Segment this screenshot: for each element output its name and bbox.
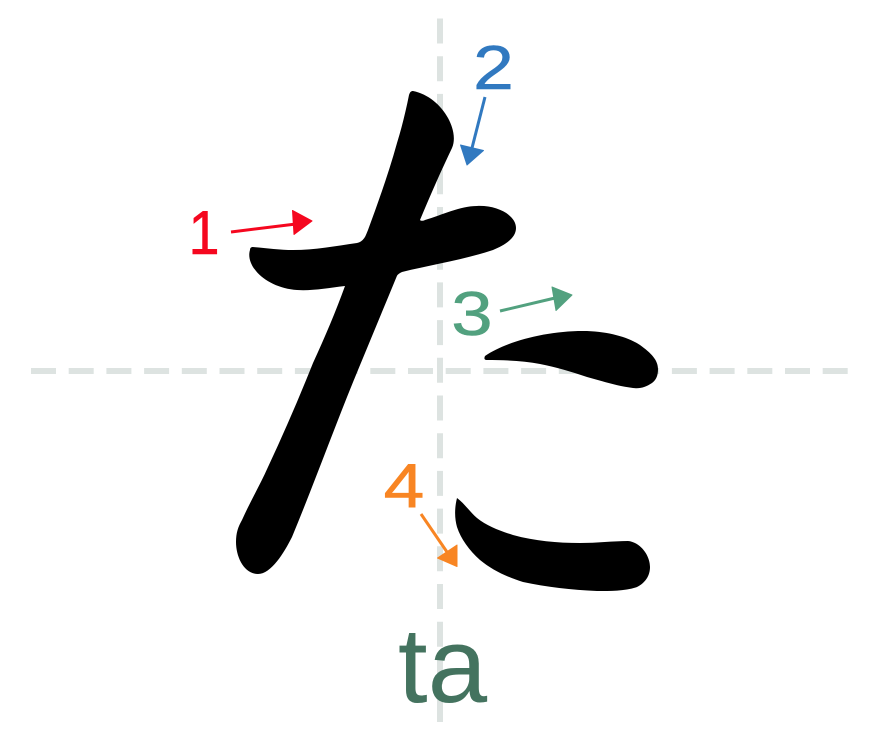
arrow 3 <box>500 287 572 311</box>
arrow 4 <box>421 514 457 566</box>
number 4: 4 <box>384 452 424 521</box>
arrow 2 <box>460 97 485 165</box>
kana stroke 3: upper short <box>484 331 658 388</box>
number 3: 3 <box>451 279 493 349</box>
arrow 1 <box>231 210 312 234</box>
number 1: 1 <box>188 199 220 268</box>
kana stroke 2: diagonal <box>236 91 454 574</box>
kana stroke 1: horizontal <box>249 206 516 290</box>
kana stroke 4: lower short <box>455 498 650 591</box>
number 2: 2 <box>473 34 514 103</box>
romaji label: ta <box>398 605 488 725</box>
